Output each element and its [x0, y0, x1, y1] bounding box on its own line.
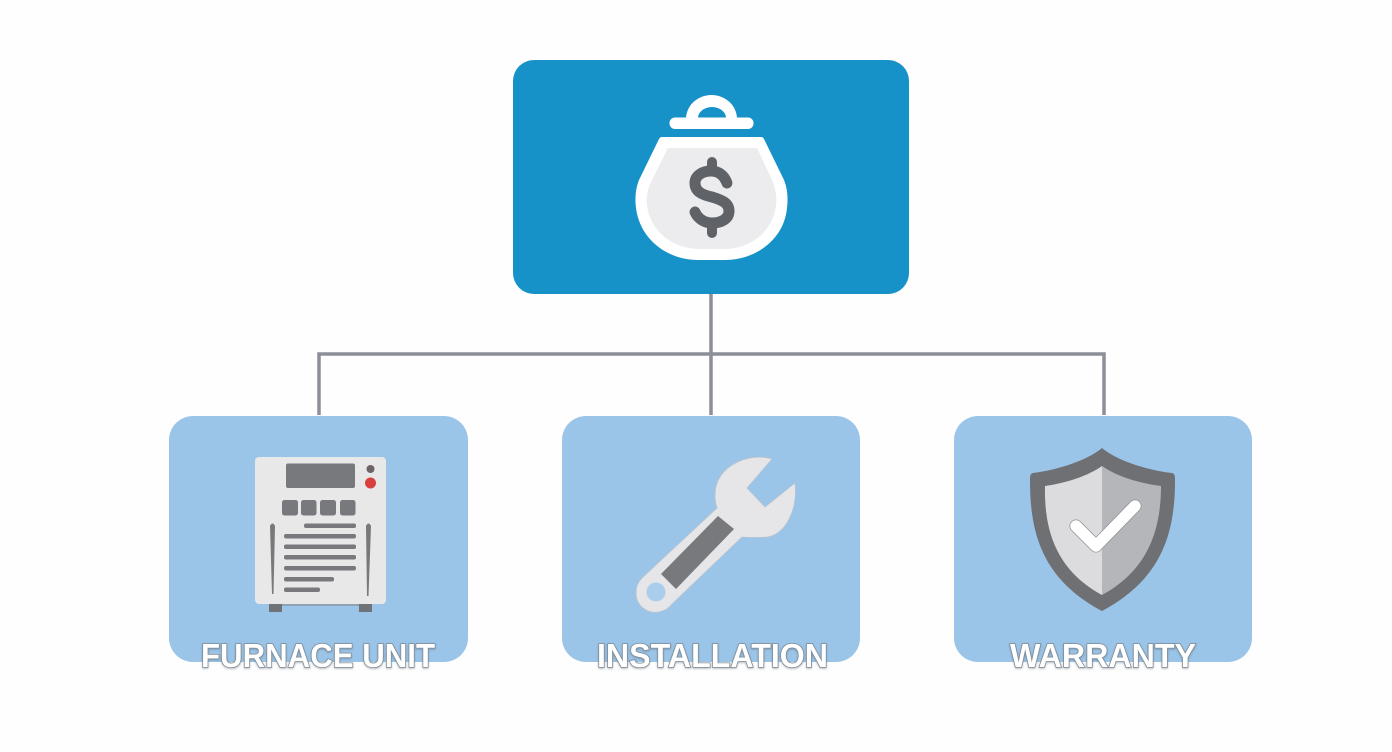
- connector lines: [319, 294, 1104, 415]
- panel: warranty: [954, 416, 1252, 674]
- label: furnace unit: FURNACE UNIT: [201, 637, 435, 674]
- checkmark: [1076, 506, 1135, 546]
- dollar sign: [695, 162, 729, 233]
- label: installation: INSTALLATION: [597, 637, 828, 674]
- icon: money bag: [635, 95, 788, 260]
- panel: installation: [562, 416, 860, 674]
- label: warranty: WARRANTY: [1010, 637, 1196, 674]
- panel: total cost: [513, 60, 909, 294]
- icon: shield: [1030, 448, 1175, 611]
- panel: furnace unit: [169, 416, 468, 674]
- icon: furnace: [255, 457, 386, 612]
- icon: wrench: [636, 457, 795, 612]
